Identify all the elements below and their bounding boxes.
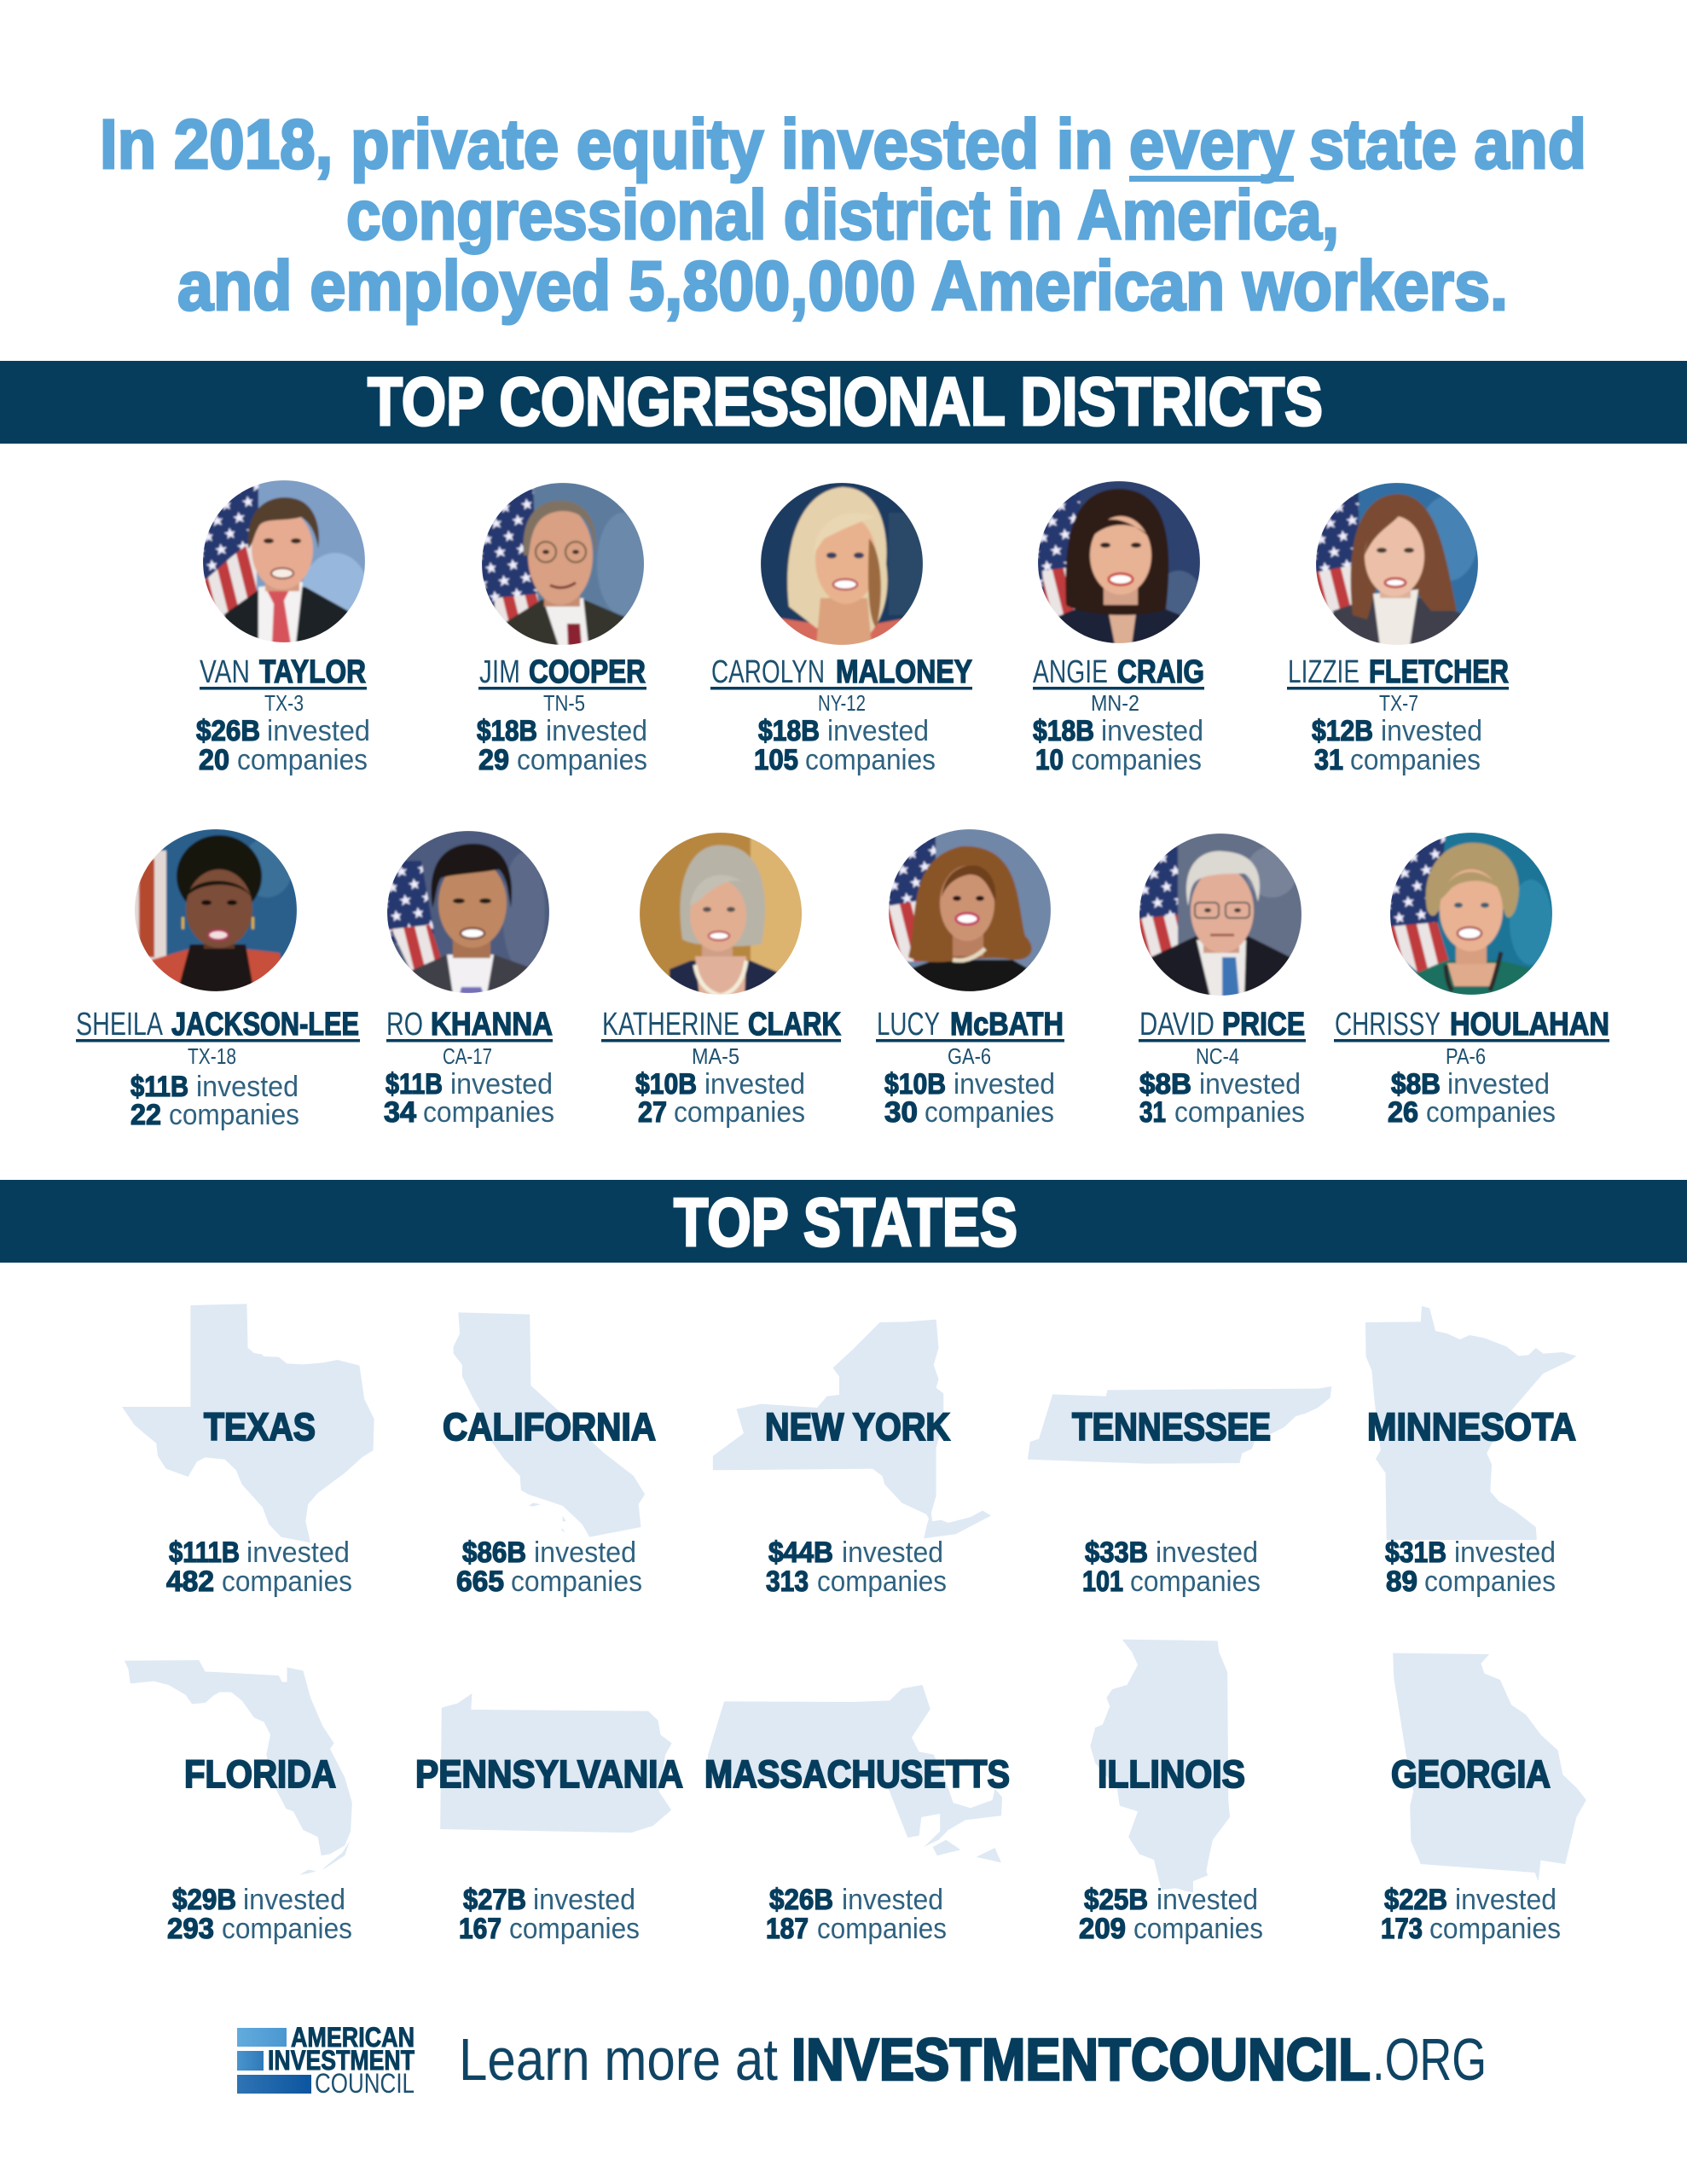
- name: Lucy McBath: [876, 1007, 1064, 1043]
- title: [100, 106, 1586, 325]
- map: Minnesota: [1365, 1306, 1576, 1540]
- card: Illinois: [1079, 1640, 1263, 1945]
- name: Lizzie Fletcher: FLETCHER: [1369, 654, 1509, 690]
- name: Carolyn Maloney: CAROLYN: [711, 654, 825, 690]
- stats: Georgia: companies: [1429, 1913, 1561, 1945]
- stats: Lizzie Fletcher: [1312, 715, 1482, 776]
- stats: Minnesota: invested: [1454, 1536, 1556, 1569]
- stats: Carolyn Maloney: companies: [805, 744, 936, 776]
- stats: Van Taylor: invested: [267, 715, 370, 747]
- card: Pennsylvania: [415, 1693, 683, 1945]
- stats: Georgia: invested: [1455, 1884, 1557, 1916]
- stats: Minnesota: [1385, 1536, 1556, 1598]
- stats: Pennsylvania: 167: [459, 1913, 501, 1945]
- title: In 2018, private equity invested in: [100, 106, 1113, 183]
- stats: Lizzie Fletcher: $12B: [1312, 715, 1373, 747]
- stats: Minnesota: companies: [1424, 1565, 1556, 1598]
- card: Angie Craig: [1033, 480, 1204, 776]
- name: Sheila Jackson-Lee: JACKSON-LEE: [171, 1007, 359, 1043]
- map: Texas: [122, 1304, 374, 1542]
- stats: Ro Khanna: $11B: [386, 1068, 443, 1101]
- stats: Sheila Jackson-Lee: 22: [130, 1099, 161, 1131]
- card: Minnesota: [1365, 1306, 1576, 1598]
- stats: Angie Craig: companies: [1071, 744, 1202, 776]
- stats: Angie Craig: $18B: [1033, 715, 1094, 747]
- name: Lizzie Fletcher: LIZZIE: [1288, 654, 1359, 690]
- district: NY-12: NY-12: [818, 690, 866, 716]
- stats: Minnesota: $31B: [1385, 1536, 1446, 1569]
- name: Jim Cooper: [478, 654, 646, 690]
- portrait: Van Taylor: [202, 479, 369, 643]
- district: MA-5: MA-5: [692, 1043, 739, 1069]
- name: Angie Craig: ANGIE: [1033, 654, 1108, 690]
- stats: Carolyn Maloney: 105: [754, 744, 798, 776]
- state name: Georgia: GEORGIA: [1391, 1752, 1551, 1796]
- state name: California: CALIFORNIA: [443, 1405, 656, 1449]
- stats: Ro Khanna: [384, 1068, 554, 1129]
- name: Jim Cooper: JIM: [479, 654, 520, 690]
- portrait: Ro Khanna: [386, 830, 550, 994]
- stats: Katherine Clark: companies: [674, 1096, 805, 1129]
- name: Chrissy Houlahan: CHRISSY: [1335, 1007, 1441, 1043]
- stats: Lizzie Fletcher: 31: [1314, 744, 1343, 776]
- stats: David Price: [1139, 1068, 1305, 1129]
- stats: Van Taylor: [196, 715, 370, 776]
- name: David Price: [1139, 1007, 1306, 1043]
- stats: New York: invested: [842, 1536, 943, 1569]
- stats: Sheila Jackson-Lee: $11B: [130, 1071, 188, 1103]
- card: Lizzie Fletcher: [1287, 482, 1509, 776]
- stats: Georgia: $22B: [1384, 1884, 1447, 1916]
- portrait: Carolyn Maloney: [760, 482, 924, 646]
- stats: New York: $44B: [768, 1536, 833, 1569]
- banner: top states: [0, 1180, 1687, 1263]
- stats: Sheila Jackson-Lee: invested: [196, 1071, 299, 1103]
- stats: Pennsylvania: companies: [509, 1913, 640, 1945]
- stats: Tennessee: invested: [1156, 1536, 1258, 1569]
- stats: Sheila Jackson-Lee: companies: [169, 1099, 299, 1131]
- stats: Lucy McBath: 30: [884, 1096, 918, 1129]
- stats: New York: [766, 1536, 947, 1598]
- stats: Illinois: companies: [1133, 1913, 1263, 1945]
- card: Georgia: [1381, 1653, 1586, 1945]
- card: David Price: [1139, 833, 1306, 1129]
- logo: American Investment Council: [237, 2022, 415, 2099]
- title: congressional district in America,: [346, 177, 1339, 254]
- stats: Georgia: 173: [1381, 1913, 1423, 1945]
- stats: Angie Craig: [1033, 715, 1203, 776]
- portrait: Lizzie Fletcher: [1315, 482, 1479, 646]
- stats: Tennessee: companies: [1130, 1565, 1261, 1598]
- stats: David Price: $8B: [1139, 1068, 1191, 1101]
- stats: Massachusetts: [766, 1884, 947, 1945]
- name: Ro Khanna: RO: [386, 1007, 423, 1043]
- name: Lizzie Fletcher: [1287, 654, 1509, 690]
- name: Katherine Clark: KATHERINE: [602, 1007, 739, 1043]
- stats: Florida: [167, 1884, 352, 1945]
- stats: Massachusetts: companies: [817, 1913, 947, 1945]
- card: Sheila Jackson-Lee: [76, 828, 360, 1131]
- name: Sheila Jackson-Lee: [76, 1007, 360, 1043]
- name: Sheila Jackson-Lee: SHEILA: [76, 1007, 163, 1043]
- stats: Jim Cooper: 29: [478, 744, 509, 776]
- name: Chrissy Houlahan: [1334, 1007, 1609, 1043]
- stats: Lucy McBath: companies: [925, 1096, 1054, 1129]
- stats: California: invested: [534, 1536, 636, 1569]
- stats: Illinois: $25B: [1084, 1884, 1148, 1916]
- stats: Angie Craig: invested: [1101, 715, 1203, 747]
- card: New York: [713, 1320, 991, 1598]
- stats: Chrissy Houlahan: companies: [1426, 1096, 1556, 1129]
- district: TX-3: TX-3: [264, 690, 304, 716]
- name: Lucy McBath: McBATH: [950, 1007, 1064, 1043]
- stats: Texas: 482: [166, 1565, 214, 1598]
- card: Katherine Clark: [601, 832, 841, 1129]
- stats: Angie Craig: 10: [1035, 744, 1064, 776]
- stats: Sheila Jackson-Lee: [130, 1071, 299, 1131]
- portrait: Sheila Jackson-Lee: [134, 828, 298, 992]
- banner: top congressional districts: [0, 361, 1687, 444]
- stats: Lucy McBath: invested: [954, 1068, 1055, 1101]
- stats: Florida: companies: [222, 1913, 352, 1945]
- stats: Katherine Clark: $10B: [635, 1068, 697, 1101]
- stats: Florida: 293: [167, 1913, 214, 1945]
- logo: American Investment Council: INVESTMENT: [268, 2045, 415, 2076]
- map: Massachusetts: [706, 1685, 1002, 1862]
- card: Ro Khanna: [384, 830, 554, 1129]
- stats: David Price: 31: [1139, 1096, 1166, 1129]
- state name: Pennsylvania: PENNSYLVANIA: [415, 1752, 683, 1796]
- stats: Massachusetts: $26B: [769, 1884, 833, 1916]
- stats: Illinois: 209: [1079, 1913, 1126, 1945]
- card: Van Taylor: [196, 479, 370, 776]
- banner: top congressional districts: TOP CONGRESSIONAL DISTRICTS: [368, 363, 1323, 439]
- state name: Tennessee: TENNESSEE: [1072, 1405, 1271, 1449]
- stats: Carolyn Maloney: $18B: [758, 715, 820, 747]
- district: MN-2: MN-2: [1091, 690, 1139, 716]
- stats: Jim Cooper: $18B: [477, 715, 537, 747]
- stats: Georgia: [1381, 1884, 1561, 1945]
- card: California: [443, 1312, 656, 1598]
- name: Jim Cooper: COOPER: [529, 654, 646, 690]
- district: PA-6: PA-6: [1446, 1043, 1486, 1069]
- name: David Price: PRICE: [1222, 1007, 1305, 1043]
- stats: Katherine Clark: [635, 1068, 805, 1129]
- stats: Katherine Clark: invested: [704, 1068, 805, 1101]
- state name: Florida: FLORIDA: [184, 1752, 336, 1796]
- stats: David Price: companies: [1174, 1096, 1305, 1129]
- name: David Price: DAVID: [1139, 1007, 1215, 1043]
- stats: California: $86B: [462, 1536, 526, 1569]
- stats: Texas: $111B: [169, 1536, 240, 1569]
- stats: Massachusetts: invested: [842, 1884, 943, 1916]
- district: CA-17: CA-17: [443, 1043, 492, 1069]
- stats: Chrissy Houlahan: $8B: [1391, 1068, 1441, 1101]
- logo: American Investment Council: COUNCIL: [315, 2068, 415, 2099]
- name: Van Taylor: [200, 654, 367, 690]
- stats: Lucy McBath: $10B: [884, 1068, 946, 1101]
- name: Van Taylor: VAN: [200, 654, 250, 690]
- stats: Texas: companies: [222, 1565, 352, 1598]
- card: Jim Cooper: [477, 482, 648, 776]
- stats: California: 665: [456, 1565, 504, 1598]
- map: New York: [713, 1320, 991, 1538]
- card: Texas: [122, 1304, 374, 1598]
- state name: New York: NEW YORK: [765, 1405, 950, 1449]
- title: state and: [1309, 106, 1586, 183]
- stats: California: companies: [511, 1565, 642, 1598]
- name: Ro Khanna: KHANNA: [431, 1007, 553, 1043]
- card: Tennessee: [1028, 1386, 1331, 1598]
- name: Carolyn Maloney: [710, 654, 972, 690]
- district: TX-18: TX-18: [188, 1043, 236, 1069]
- call to action: website: [459, 2026, 1487, 2093]
- portrait: Angie Craig: [1037, 480, 1204, 644]
- stats: Pennsylvania: invested: [533, 1884, 635, 1916]
- stats: New York: companies: [817, 1565, 947, 1598]
- portrait: Lucy McBath: [888, 828, 1052, 992]
- stats: Jim Cooper: companies: [517, 744, 647, 776]
- stats: Jim Cooper: [477, 715, 647, 776]
- card: Florida: [125, 1660, 352, 1945]
- state name: Massachusetts: MASSACHUSETTS: [704, 1752, 1010, 1796]
- stats: Tennessee: $33B: [1085, 1536, 1148, 1569]
- stats: Texas: [166, 1536, 352, 1598]
- title: and employed 5,800,000 American workers.: [177, 247, 1508, 325]
- district: GA-6: GA-6: [948, 1043, 991, 1069]
- card: Massachusetts: [704, 1685, 1010, 1945]
- map: Georgia: [1393, 1653, 1586, 1881]
- stats: California: [456, 1536, 642, 1598]
- stats: Pennsylvania: $27B: [463, 1884, 526, 1916]
- stats: Chrissy Houlahan: invested: [1447, 1068, 1550, 1101]
- stats: Florida: invested: [243, 1884, 345, 1916]
- stats: Tennessee: 101: [1082, 1565, 1123, 1598]
- card: Lucy McBath: [876, 828, 1064, 1129]
- name: Carolyn Maloney: MALONEY: [836, 654, 972, 690]
- portrait: David Price: [1139, 833, 1302, 996]
- logo: American Investment Council: AMERICAN: [291, 2022, 415, 2053]
- banner: top states: TOP STATES: [674, 1184, 1017, 1260]
- map: Florida: [125, 1660, 352, 1875]
- stats: Carolyn Maloney: invested: [827, 715, 929, 747]
- stats: Van Taylor: $26B: [196, 715, 260, 747]
- map: Illinois: [1090, 1640, 1230, 1892]
- stats: Illinois: [1079, 1884, 1263, 1945]
- state name: Illinois: ILLINOIS: [1098, 1752, 1245, 1796]
- name: Lucy McBath: LUCY: [877, 1007, 940, 1043]
- stats: Minnesota: 89: [1386, 1565, 1417, 1598]
- stats: Illinois: invested: [1157, 1884, 1258, 1916]
- state name: Texas: TEXAS: [204, 1405, 316, 1449]
- stats: Ro Khanna: companies: [423, 1096, 554, 1129]
- name: Angie Craig: [1033, 654, 1204, 690]
- name: Van Taylor: TAYLOR: [259, 654, 366, 690]
- title: every: [1129, 106, 1294, 183]
- stats: Massachusetts: 187: [766, 1913, 809, 1945]
- portrait: Katherine Clark: [639, 832, 803, 996]
- district: NC-4: NC-4: [1196, 1043, 1239, 1069]
- state name: Minnesota: MINNESOTA: [1367, 1405, 1576, 1449]
- portrait: Jim Cooper: [481, 482, 648, 646]
- map: Tennessee: [1028, 1386, 1331, 1464]
- name: Chrissy Houlahan: HOULAHAN: [1450, 1007, 1609, 1043]
- stats: Carolyn Maloney: [754, 715, 936, 776]
- stats: Van Taylor: 20: [199, 744, 229, 776]
- map: Pennsylvania: [440, 1693, 672, 1833]
- stats: Jim Cooper: invested: [546, 715, 647, 747]
- stats: Van Taylor: companies: [237, 744, 368, 776]
- call to action: website: Learn more at: [459, 2026, 778, 2093]
- stats: Ro Khanna: invested: [450, 1068, 553, 1101]
- stats: Lucy McBath: [884, 1068, 1055, 1129]
- call to action: website: INVESTMENTCOUNCIL: [791, 2026, 1371, 2093]
- stats: Ro Khanna: 34: [384, 1096, 416, 1129]
- stats: Lizzie Fletcher: companies: [1350, 744, 1481, 776]
- stats: Florida: $29B: [172, 1884, 236, 1916]
- district: TN-5: TN-5: [543, 690, 585, 716]
- name: Angie Craig: CRAIG: [1117, 654, 1204, 690]
- map: California: [454, 1312, 645, 1537]
- stats: Chrissy Houlahan: 26: [1388, 1096, 1418, 1129]
- stats: Texas: invested: [246, 1536, 350, 1569]
- name: Ro Khanna: [386, 1007, 553, 1043]
- stats: Chrissy Houlahan: [1388, 1068, 1556, 1129]
- stats: New York: 313: [766, 1565, 809, 1598]
- card: Chrissy Houlahan: [1334, 832, 1609, 1129]
- card: Carolyn Maloney: [710, 482, 972, 776]
- stats: Pennsylvania: [459, 1884, 640, 1945]
- name: Katherine Clark: CLARK: [748, 1007, 841, 1043]
- district: TX-7: TX-7: [1379, 690, 1418, 716]
- stats: David Price: invested: [1199, 1068, 1301, 1101]
- stats: Lizzie Fletcher: invested: [1381, 715, 1482, 747]
- stats: Tennessee: [1082, 1536, 1261, 1598]
- stats: Katherine Clark: 27: [638, 1096, 667, 1129]
- call to action: website: .ORG: [1372, 2026, 1487, 2093]
- portrait: Chrissy Houlahan: [1389, 832, 1553, 996]
